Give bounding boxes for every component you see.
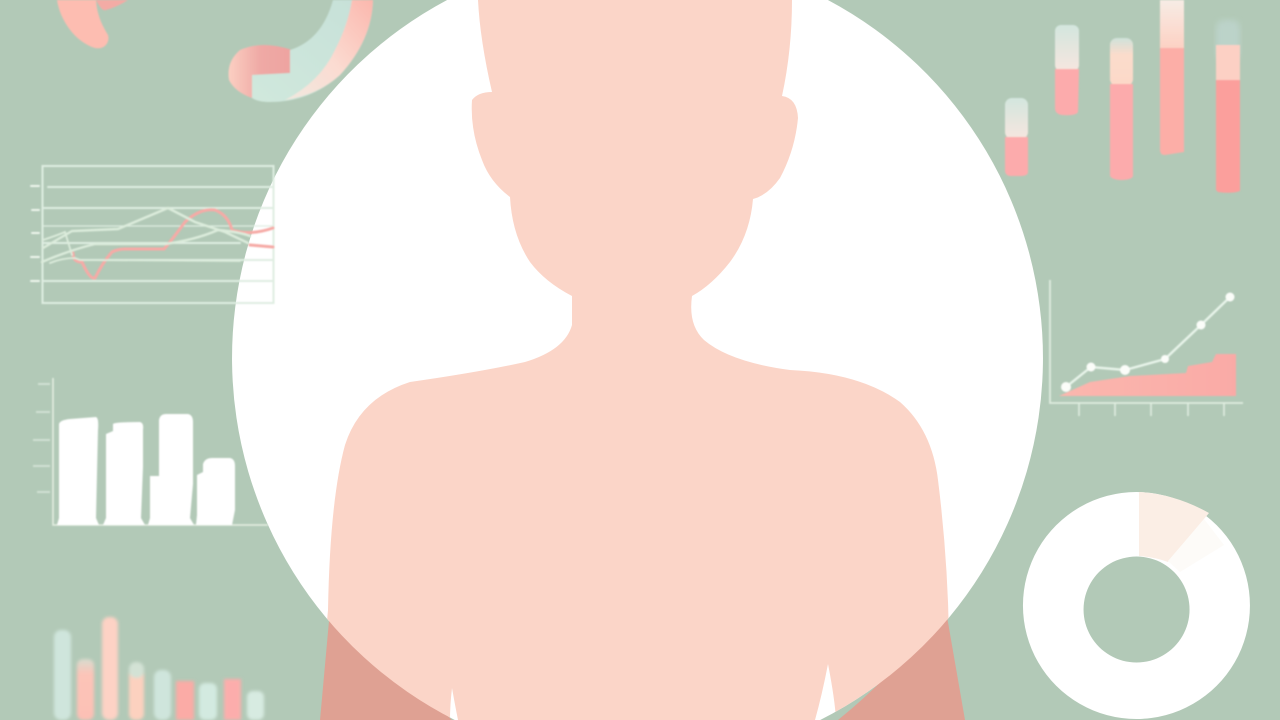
stacked bars top right: [1005, 0, 1240, 193]
pink series: [73, 210, 273, 278]
line and area chart right: [1050, 280, 1243, 416]
frame and grid: [31, 166, 274, 303]
arc chart top left: [57, 0, 128, 48]
large white circle: [232, 0, 1043, 720]
bars: [57, 417, 99, 525]
donut chart right: [1023, 492, 1250, 719]
axes: [53, 378, 268, 525]
pale series: [43, 208, 248, 248]
line chart left: [31, 166, 274, 303]
arc chart top centre: [228, 0, 373, 102]
axes: [1050, 280, 1243, 403]
area: [1059, 354, 1236, 396]
bars bottom left: [54, 617, 264, 720]
line: [1066, 297, 1230, 387]
arms darker outside circle: [320, 605, 965, 720]
head and torso: [318, 0, 962, 720]
bar chart left white: [33, 378, 268, 525]
silhouette: person: [318, 0, 965, 720]
